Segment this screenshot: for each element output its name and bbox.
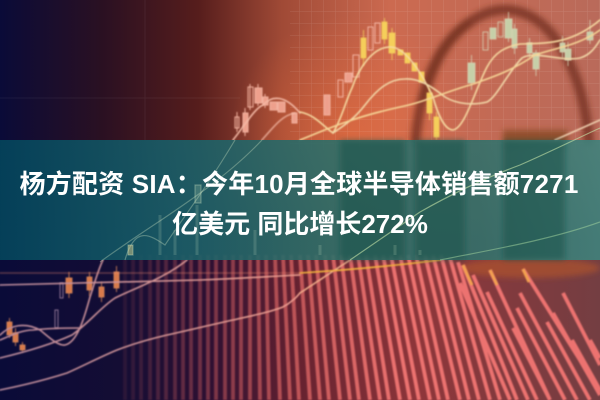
moving average curves: lower (0, 260, 440, 390)
faint chart lines in band (100, 128, 600, 262)
title line 2: 亿美元 同比增长272% (172, 209, 428, 239)
title (19, 169, 579, 239)
stripe bar chart: lower (125, 255, 600, 400)
teal title band (0, 128, 600, 262)
coin stacks seen through band (340, 140, 565, 260)
pale candles left (235, 23, 380, 136)
candlestick chart: upper centre (235, 12, 593, 140)
candlestick chart: lower left (7, 266, 119, 352)
title line 1: 杨方配资 SIA：今年10月全球半导体销售额7271 (19, 169, 579, 199)
arch shape and coin stacks photo layer (415, 10, 600, 278)
pale green candles (468, 12, 593, 90)
yellow candles (361, 18, 439, 140)
moving average curves: upper (233, 20, 600, 140)
